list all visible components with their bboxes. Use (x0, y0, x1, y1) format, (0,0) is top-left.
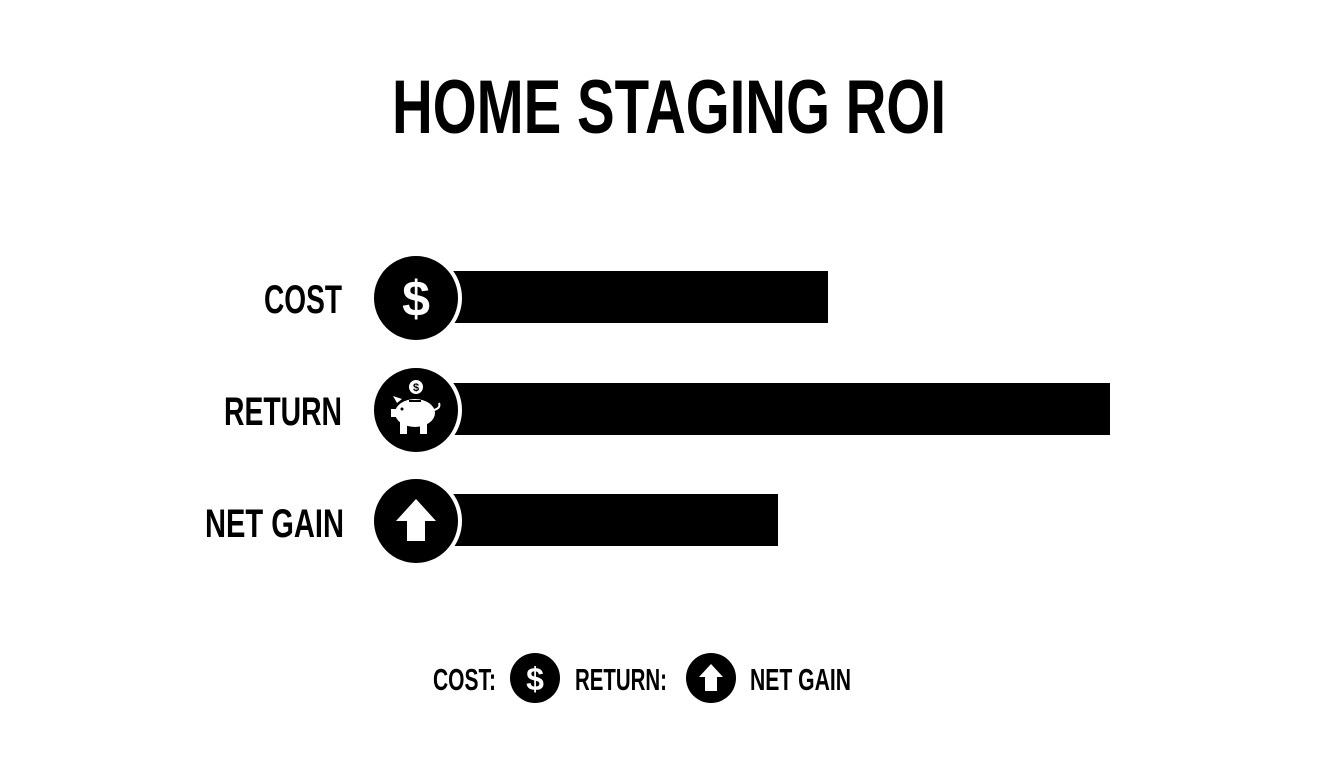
title: HOME STAGING ROI (392, 65, 946, 150)
label: return: RETURN (224, 390, 342, 434)
row: net gain (205, 477, 778, 565)
bar: return (448, 383, 1110, 435)
row: cost (264, 254, 828, 342)
icon: dollar (372, 254, 460, 342)
bar: cost (448, 271, 828, 323)
legend icon: dollar (510, 653, 560, 703)
chart: ROI bars (205, 254, 1110, 565)
icon: piggy bank: $ (413, 382, 419, 394)
icon: dollar: $ (402, 271, 430, 327)
label: cost: COST (264, 278, 342, 322)
bar: net gain (448, 494, 778, 546)
row: return (224, 366, 1110, 454)
icon: up arrow (372, 477, 460, 565)
label: net gain: NET GAIN (205, 502, 344, 546)
legend: cost label: COST: (433, 662, 496, 697)
legend icon: up arrow (686, 653, 736, 703)
legend: net gain label: NET GAIN (750, 662, 851, 697)
legend: return label: RETURN: (575, 662, 667, 697)
legend (433, 653, 851, 703)
icon: piggy bank (372, 366, 460, 454)
legend icon: dollar: $ (526, 661, 544, 697)
